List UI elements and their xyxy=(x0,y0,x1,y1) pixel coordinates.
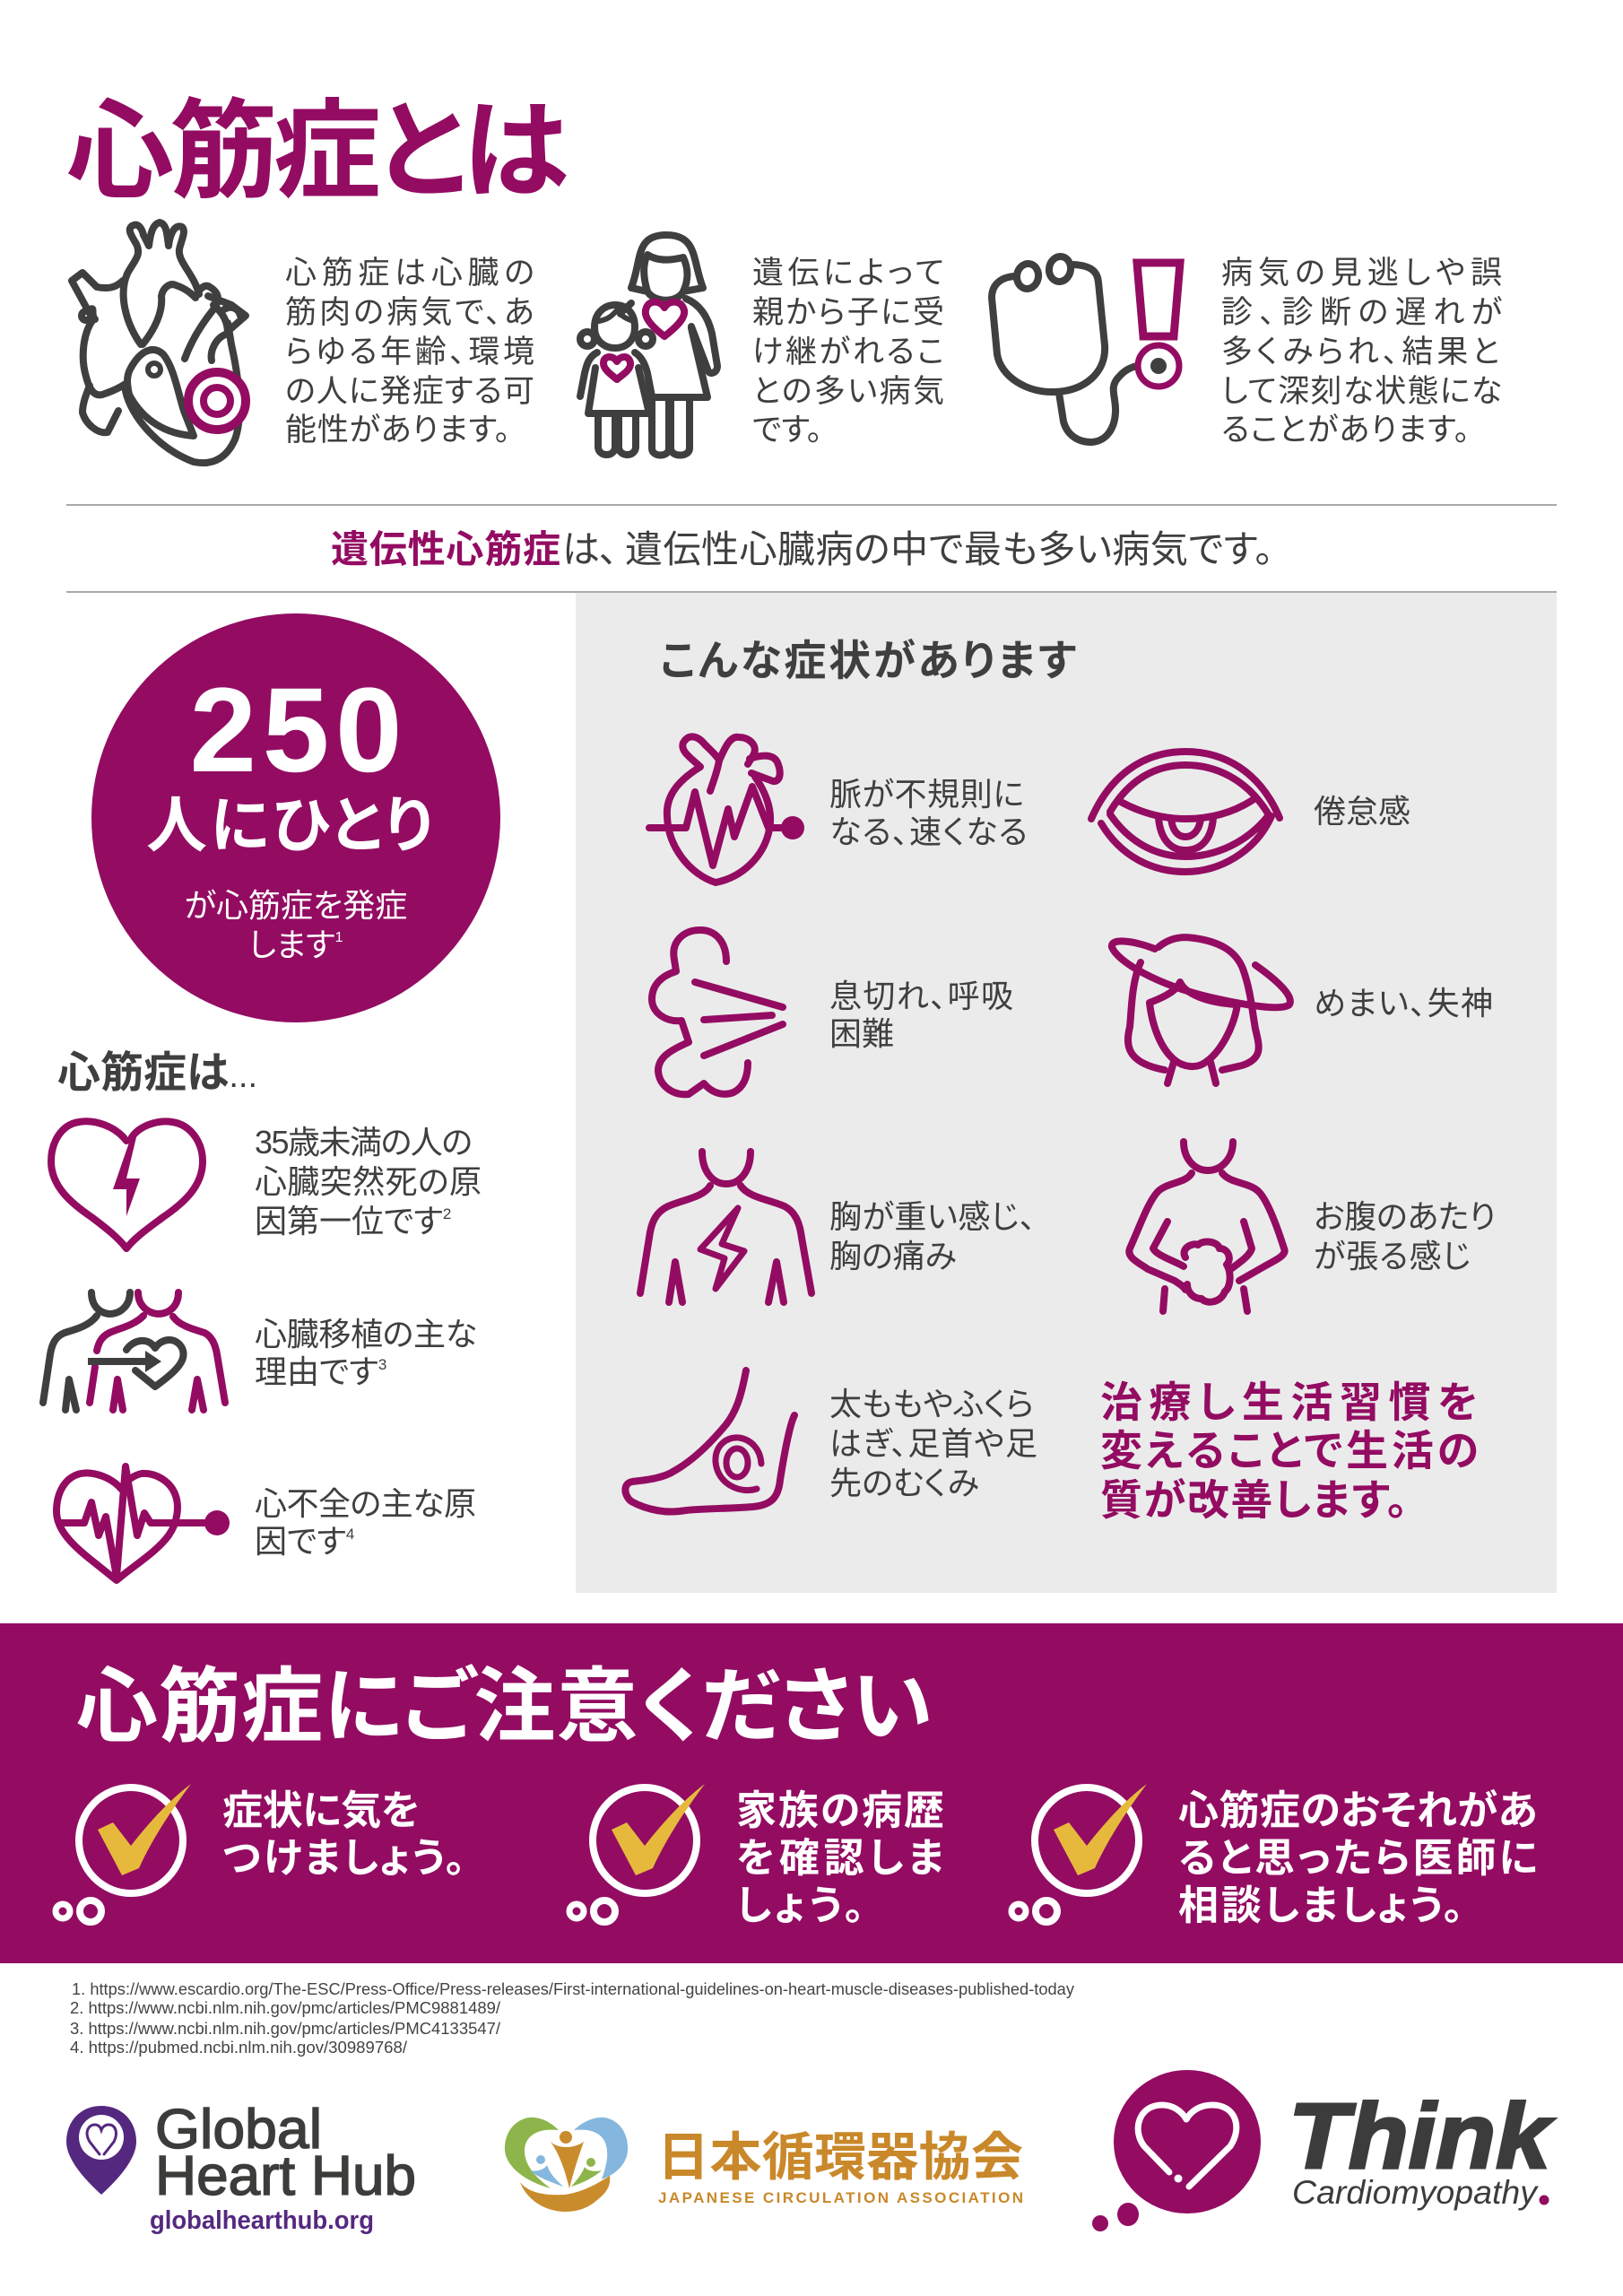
text: swelling: はぎ、足首や足 xyxy=(829,1425,1037,1462)
logo: Think Cardiomyopathy: Think xyxy=(1289,2084,1555,2187)
logo: Japanese Circulation Association: 日本循環器協会 xyxy=(657,2128,1023,2187)
text: inherited: け継がれるこ xyxy=(752,335,944,370)
icon: check mark bubble xyxy=(56,1784,191,1922)
text: heart failure: 心不全の主な原 xyxy=(255,1485,476,1522)
logo: Global Heart Hub xyxy=(66,2099,416,2235)
text: heart failure xyxy=(255,1485,476,1560)
icon: heart and hands emblem xyxy=(505,2118,628,2212)
footnotes: 1. https://www.escardio.org/The-ESC/Press-Office/Press-releases/First-international-guidelines-on-heart-muscle-diseases-published-today xyxy=(72,1980,1074,1998)
icon: speech bubble heart xyxy=(1092,2070,1261,2231)
text: leading cause under 35: 35歳未満の人の xyxy=(255,1124,473,1161)
footnotes: 4. https://pubmed.ncbi.nlm.nih.gov/30989768/ xyxy=(70,2039,407,2057)
text: しょう。 xyxy=(736,1883,864,1928)
item: family history xyxy=(569,1784,944,1928)
heading: こんな症状があります xyxy=(660,637,1076,684)
text xyxy=(736,1787,944,1928)
panel: grey symptoms background xyxy=(576,593,1557,1593)
item: consult doctor xyxy=(1011,1784,1538,1928)
text: missed diagnosis: 診、診断の遅れが xyxy=(1221,295,1503,330)
text: inherited: との多い病気 xyxy=(752,374,944,409)
text: what is cardiomyopathy: の人に発症する可 xyxy=(285,374,534,409)
stat caption: 1 xyxy=(335,930,343,945)
text: breathlessness: 困難 xyxy=(829,1015,894,1052)
stat number: 250 xyxy=(190,664,402,797)
text: leading cause under 35: 因第一位です xyxy=(255,1203,443,1239)
text: bloating: お腹のあたり xyxy=(1314,1198,1496,1235)
panel: 1 in 250 circle xyxy=(91,613,500,1022)
icon: heart with ecg xyxy=(56,1466,230,1580)
text: chest pain xyxy=(829,1198,1036,1274)
panel: warning band xyxy=(0,1623,1623,1963)
text: transplant xyxy=(255,1316,477,1390)
stat caption xyxy=(185,887,407,963)
text: what is cardiomyopathy xyxy=(285,256,534,448)
text: 症状に気を xyxy=(222,1787,420,1833)
text: what is cardiomyopathy: 心筋症は心臓の xyxy=(285,256,534,291)
callout: treatment message: 質が改善します。 xyxy=(1100,1476,1408,1524)
logo: Global Heart Hub: Global xyxy=(155,2099,322,2161)
text: fatigue: 倦怠感 xyxy=(1314,793,1410,830)
text: missed diagnosis: 病気の見逃しや誤 xyxy=(1221,256,1502,291)
text: leading cause under 35: 心臓突然死の原 xyxy=(255,1163,482,1200)
text: 家族の病歴 xyxy=(736,1787,944,1833)
text: leading cause under 35 xyxy=(255,1124,482,1239)
text: chest pain: 胸が重い感じ、 xyxy=(829,1198,1036,1235)
text: irregular pulse xyxy=(829,776,1028,850)
statement line: 遺伝性心筋症 xyxy=(331,528,560,570)
icon: chest pain xyxy=(640,1152,812,1302)
text: transplant: 心臓移植の主な xyxy=(255,1316,477,1352)
logo: Japanese Circulation Association: JAPANESE CIRCULATION ASSOCIATION xyxy=(658,2189,1023,2206)
icon: broken heart xyxy=(51,1121,203,1248)
item: check symptoms xyxy=(56,1784,465,1922)
text xyxy=(222,1787,465,1881)
text: irregular pulse: なる、速くなる xyxy=(829,813,1028,850)
title: 心筋症とは xyxy=(66,91,568,212)
icon: location pin heart xyxy=(66,2106,136,2195)
text: ると思ったら医師に xyxy=(1178,1835,1538,1881)
text: つけましょう。 xyxy=(222,1835,465,1881)
text: dizziness: めまい、失神 xyxy=(1314,985,1493,1022)
stat caption: します xyxy=(248,926,335,963)
stat caption: が心筋症を発症 xyxy=(185,887,407,924)
icon: tired eye xyxy=(1091,752,1280,872)
text: swelling xyxy=(829,1386,1037,1501)
text: を確認しま xyxy=(736,1835,944,1881)
text: irregular pulse: 脈が不規則に xyxy=(829,776,1024,813)
icon: anatomical heart with target xyxy=(72,222,246,463)
band heading: 心筋症にご注意ください xyxy=(76,1662,933,1752)
logo: Japanese Circulation Association xyxy=(505,2118,1023,2212)
text: transplant: 理由です xyxy=(255,1353,378,1390)
icon: breathlessness xyxy=(652,930,783,1094)
text: 相談しましょう。 xyxy=(1178,1883,1463,1928)
panel: symptoms xyxy=(625,637,1496,1524)
text: breathlessness xyxy=(829,978,1013,1052)
footnotes xyxy=(70,1980,1074,2057)
text: swelling: 太ももやふくら xyxy=(829,1386,1034,1422)
callout: treatment message xyxy=(1100,1378,1479,1524)
text: what is cardiomyopathy: らゆる年齢、環境 xyxy=(285,335,534,370)
icon: mother and daughter xyxy=(580,235,717,456)
statement line xyxy=(331,528,1273,570)
text xyxy=(1178,1787,1538,1928)
footnotes: 2. https://www.ncbi.nlm.nih.gov/pmc/articles/PMC9881489/ xyxy=(70,1999,500,2017)
text: bloating: が張る感じ xyxy=(1314,1238,1471,1274)
heading: 心筋症は... xyxy=(57,1049,257,1097)
text: what is cardiomyopathy: 筋肉の病気で、あ xyxy=(285,295,534,330)
text: missed diagnosis: ることがあります。 xyxy=(1221,413,1470,448)
callout: treatment message: 治療し生活習慣を xyxy=(1100,1378,1478,1426)
text: leading cause under 35: 2 xyxy=(443,1205,451,1222)
logo: Global Heart Hub: Heart Hub xyxy=(155,2145,416,2207)
icon: abdominal bloating xyxy=(1129,1142,1285,1311)
panel: intro row xyxy=(72,222,1503,463)
logo: Think Cardiomyopathy xyxy=(1092,2070,1555,2231)
text: chest pain: 胸の痛み xyxy=(829,1238,957,1274)
icon: check mark bubble xyxy=(1011,1784,1147,1922)
text: heart failure: 因です xyxy=(255,1523,346,1560)
text: 心筋症のおそれがあ xyxy=(1178,1787,1538,1833)
text: missed diagnosis: して深刻な状態にな xyxy=(1221,374,1502,409)
icon: heart transplant xyxy=(43,1292,225,1410)
callout: treatment message: 変えることで生活の xyxy=(1100,1427,1479,1474)
text: inherited: です。 xyxy=(752,413,822,448)
statement line: は、 xyxy=(562,528,618,570)
footnotes: 3. https://www.ncbi.nlm.nih.gov/pmc/articles/PMC4133547/ xyxy=(70,2020,500,2038)
text: heart failure: 4 xyxy=(346,1526,354,1543)
icon: swollen foot xyxy=(625,1370,794,1512)
text: inherited: 遺伝によって xyxy=(752,256,944,291)
icon: stethoscope with exclamation mark xyxy=(992,255,1180,442)
stat label: 人にひとり xyxy=(146,792,433,860)
logo: Global Heart Hub: globalhearthub.org xyxy=(150,2206,374,2235)
icon: dizziness head xyxy=(1112,937,1290,1083)
logo: Think Cardiomyopathy: Cardiomyopathy xyxy=(1292,2174,1540,2211)
text: inherited xyxy=(752,256,944,448)
icon: check mark bubble xyxy=(569,1784,705,1922)
text: transplant: 3 xyxy=(378,1356,386,1373)
icon: irregular pulse heart xyxy=(649,736,804,883)
text: inherited: 親から子に受 xyxy=(752,295,944,330)
text: bloating xyxy=(1314,1198,1496,1274)
text: what is cardiomyopathy: 能性があります。 xyxy=(285,413,510,448)
text: missed diagnosis: 多くみられ、結果と xyxy=(1221,335,1499,370)
text: swelling: 先のむくみ xyxy=(829,1465,979,1501)
panel: left facts xyxy=(43,1049,482,1580)
text: missed diagnosis xyxy=(1221,256,1503,448)
text: breathlessness: 息切れ、呼吸 xyxy=(829,978,1013,1014)
statement line: 遺伝性心臓病の中で最も多い病気です。 xyxy=(625,528,1273,570)
